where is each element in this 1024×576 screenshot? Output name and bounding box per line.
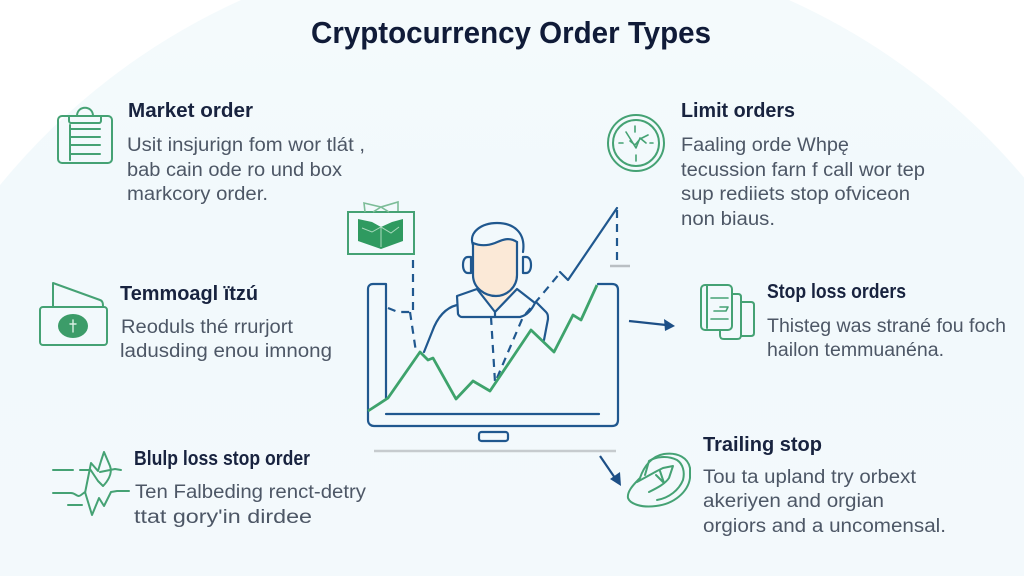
text: blulp description: ttat gory'in dirdee bbox=[134, 507, 312, 528]
panel: temmoaglitzu bbox=[40, 283, 332, 362]
text: limit orders description: Faaling orde Whpę bbox=[681, 135, 849, 156]
text: stop loss description: hailon temmuanéna. bbox=[767, 340, 944, 361]
text: limit orders description: tecussion farn f call wor tep bbox=[681, 160, 925, 181]
text: market order description bbox=[127, 135, 365, 205]
text: trailing stop description: Tou ta upland try orbext bbox=[703, 467, 917, 488]
icon: stacked documents bbox=[701, 285, 754, 339]
arrow: to trailing stop bbox=[600, 456, 621, 486]
gift box icon bbox=[348, 202, 414, 254]
heading: market order: Market order bbox=[128, 100, 253, 122]
text: market order description: Usit insjurign fom wor tlát , bbox=[127, 135, 365, 156]
person bbox=[424, 223, 548, 352]
green price line bbox=[368, 285, 597, 411]
monitor base line bbox=[374, 450, 616, 452]
rising blue line bbox=[497, 208, 617, 378]
icon: clock bbox=[608, 115, 664, 171]
panel: trailing stop bbox=[628, 434, 946, 537]
panel: limit orders bbox=[608, 100, 925, 230]
icon: pulse leaf bbox=[53, 452, 129, 515]
panel: market order bbox=[58, 100, 365, 205]
text: stop loss description bbox=[767, 316, 1006, 361]
text: blulp description: Ten Falbeding renct-detry bbox=[135, 482, 367, 503]
text: trailing stop description: akeriyen and orgian bbox=[703, 491, 884, 512]
text: trailing stop description: orgiors and a uncomensal. bbox=[703, 516, 946, 537]
text: limit orders description: non biaus. bbox=[681, 209, 775, 230]
title: Cryptocurrency Order Types bbox=[311, 15, 711, 50]
text: temmoaglitzu description: Reoduls thé rrurjort bbox=[121, 317, 294, 338]
text: market order description: markcory order. bbox=[127, 184, 268, 205]
dashed connector from gift box bbox=[388, 260, 416, 352]
text: trailing stop description bbox=[703, 467, 946, 537]
heading: limit orders: Limit orders bbox=[681, 100, 795, 122]
ground tick bbox=[610, 265, 630, 267]
text: stop loss description: Thisteg was strané fou foch bbox=[767, 316, 1006, 337]
text: blulp description bbox=[134, 482, 367, 528]
icon: wallet bbox=[40, 283, 107, 345]
text: limit orders description: sup rediiets stop ofviceon bbox=[681, 184, 910, 205]
heading: temmoaglitzu: Temmoagl ïtzú bbox=[120, 283, 258, 305]
panel: blulp loss stop order bbox=[53, 448, 367, 528]
heading: trailing stop: Trailing stop bbox=[703, 434, 822, 456]
icon: clipboard bbox=[58, 108, 112, 163]
icon: trailing swirl bbox=[628, 454, 690, 507]
text: temmoaglitzu description: ladusding enou imnong bbox=[120, 341, 332, 362]
arrow: to stop loss orders bbox=[629, 319, 675, 331]
text: market order description: bab cain ode ro und box bbox=[127, 160, 343, 181]
panel: stop loss orders bbox=[701, 281, 1006, 361]
monitor bbox=[368, 284, 618, 441]
illustration: trader at monitor bbox=[348, 202, 630, 451]
heading: stop loss orders: Stop loss orders bbox=[767, 281, 906, 303]
heading: blulp loss stop order: Blulp loss stop order bbox=[134, 448, 310, 470]
dashed zipper line bbox=[491, 317, 495, 382]
text: limit orders description bbox=[681, 135, 925, 230]
text: temmoaglitzu description bbox=[120, 317, 332, 362]
